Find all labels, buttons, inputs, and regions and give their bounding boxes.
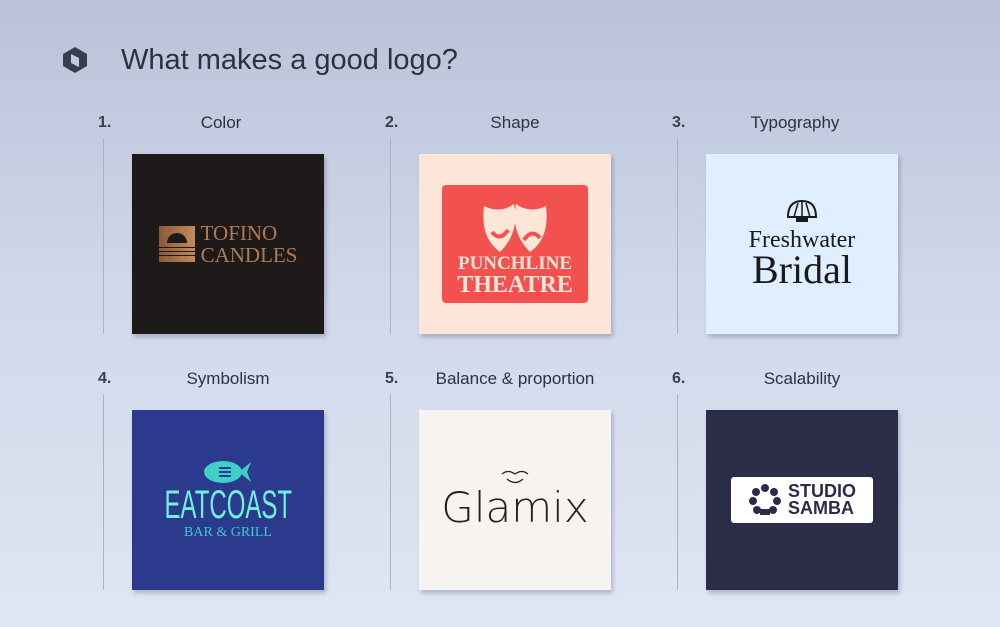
item 5: Balance & proportion: 5. [385,370,398,387]
brand icon [63,47,87,73]
item 5: Balance & proportion [385,369,615,595]
card: Eatcoast: BAR & GRILL [184,525,272,540]
item 5: Balance & proportion: Balance & proportion [436,369,594,388]
card: Tofino Candles: TOFINO [201,221,277,245]
item 3: Typography: 3. [672,114,685,131]
card: Studio Samba: STUDIO [788,481,856,501]
item 4: Symbolism: 4. [98,370,111,387]
card: Punchline Theatre: PUNCHLINE [458,253,572,274]
item 6: Scalability: Scalability [764,369,840,388]
item 6: Scalability: 6. [672,370,685,387]
card: Tofino Candles [132,154,324,334]
card: Glamix [419,410,611,590]
item 4: Symbolism: Symbolism [186,369,270,388]
item 1: Color [98,113,328,339]
card: Studio Samba [706,410,898,590]
item 2: Shape: Shape [490,113,540,132]
item 1: Color: Color [201,113,241,132]
item 2: Shape: 2. [385,114,398,131]
item 4: Symbolism [98,369,328,595]
card: Glamix: Glamix [441,483,589,532]
card: Freshwater Bridal: Freshwater [749,227,855,253]
card: Eatcoast: EATCOAST [164,483,292,527]
card: Freshwater Bridal: Bridal [752,247,852,292]
item 3: Typography [672,113,902,339]
item 6: Scalability [672,369,902,595]
title: What makes a good logo? [121,44,458,76]
card: Studio Samba: SAMBA [788,498,854,518]
card: Freshwater Bridal [706,154,898,334]
item 3: Typography: Typography [751,113,839,132]
card: Eatcoast [132,410,324,590]
card: Punchline Theatre [419,154,611,334]
card: Punchline Theatre: THEATRE [457,272,573,298]
card: Tofino Candles: CANDLES [201,243,297,267]
item 2: Shape [385,113,615,339]
item 1: Color: 1. [98,114,111,131]
